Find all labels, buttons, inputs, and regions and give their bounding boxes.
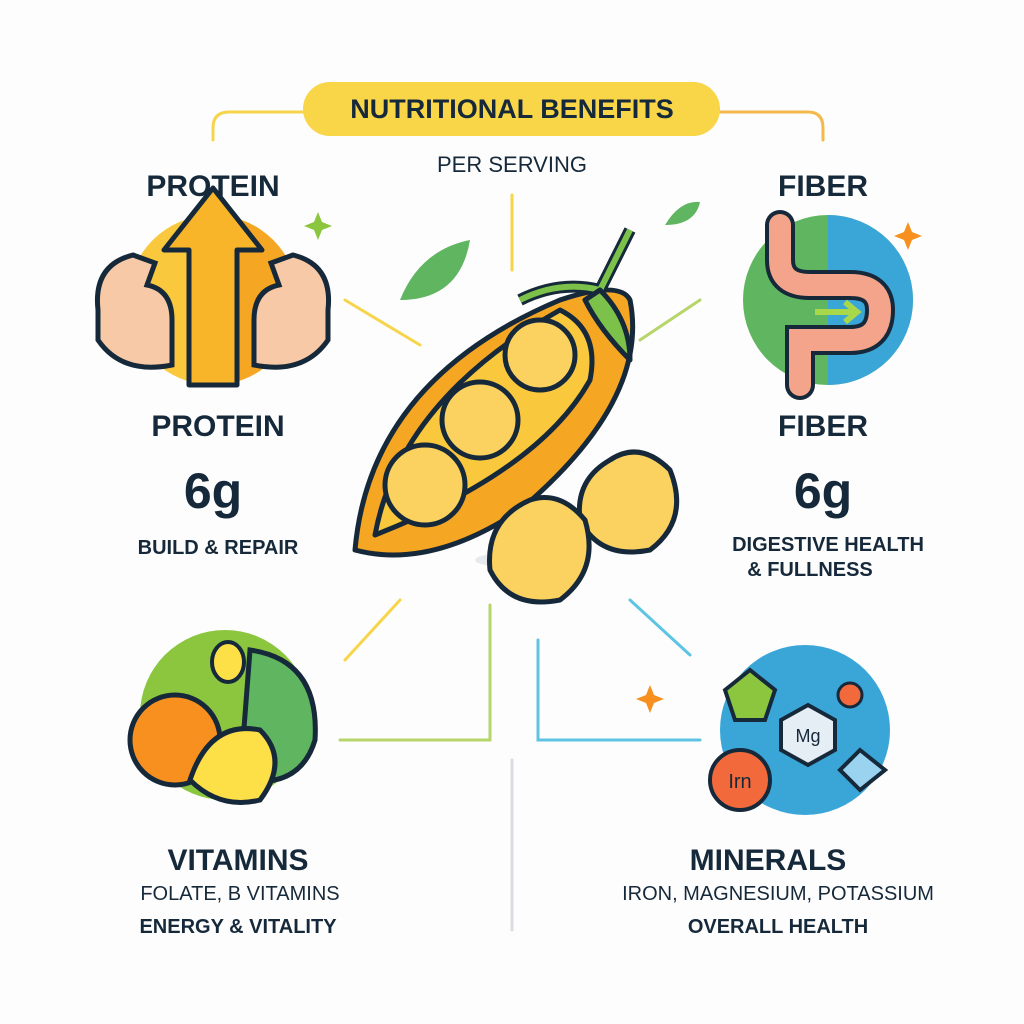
icon: minerals (710, 645, 890, 815)
text block: fiber: & FULLNESS (747, 559, 873, 581)
text block: vitamins (139, 844, 340, 938)
icon: leaf (400, 240, 470, 300)
text block: vitamins: VITAMINS (167, 844, 309, 877)
text block: protein (138, 410, 299, 559)
text block: minerals: OVERALL HEALTH (688, 916, 868, 938)
text block: fiber: FIBER (778, 410, 868, 443)
text block: protein: BUILD & REPAIR (138, 537, 299, 559)
title: NUTRITIONAL BENEFITS (350, 94, 674, 124)
icon: fiber digestive (743, 215, 913, 385)
text block: fiber: 6g (794, 463, 852, 519)
icon: sparkle minerals (636, 685, 664, 713)
icon: minerals: Mg (795, 726, 821, 746)
text block: protein: PROTEIN (151, 410, 285, 443)
subtitle: PER SERVING (437, 152, 587, 177)
text block: fiber (732, 410, 924, 581)
text block: fiber: DIGESTIVE HEALTH (732, 534, 924, 556)
heading: protein top: PROTEIN (146, 170, 280, 203)
icon: minerals: Irn (728, 771, 752, 793)
text block: vitamins: FOLATE, B VITAMINS (140, 883, 340, 905)
text block: minerals: MINERALS (690, 844, 846, 877)
icon: protein flexing arms with arrow (97, 188, 329, 385)
icon: sparkle (304, 212, 332, 240)
illustration: pea pod (355, 230, 677, 602)
icon: sparkle orange (894, 222, 922, 250)
heading: fiber top: FIBER (778, 170, 868, 203)
title (303, 82, 720, 136)
text block: protein: 6g (184, 463, 242, 519)
text block: minerals (622, 844, 934, 938)
text block: vitamins: ENERGY & VITALITY (139, 916, 337, 938)
text block: minerals: IRON, MAGNESIUM, POTASSIUM (622, 883, 934, 905)
icon: leaf right (665, 202, 700, 225)
icon: vitamins fruits (130, 630, 315, 802)
